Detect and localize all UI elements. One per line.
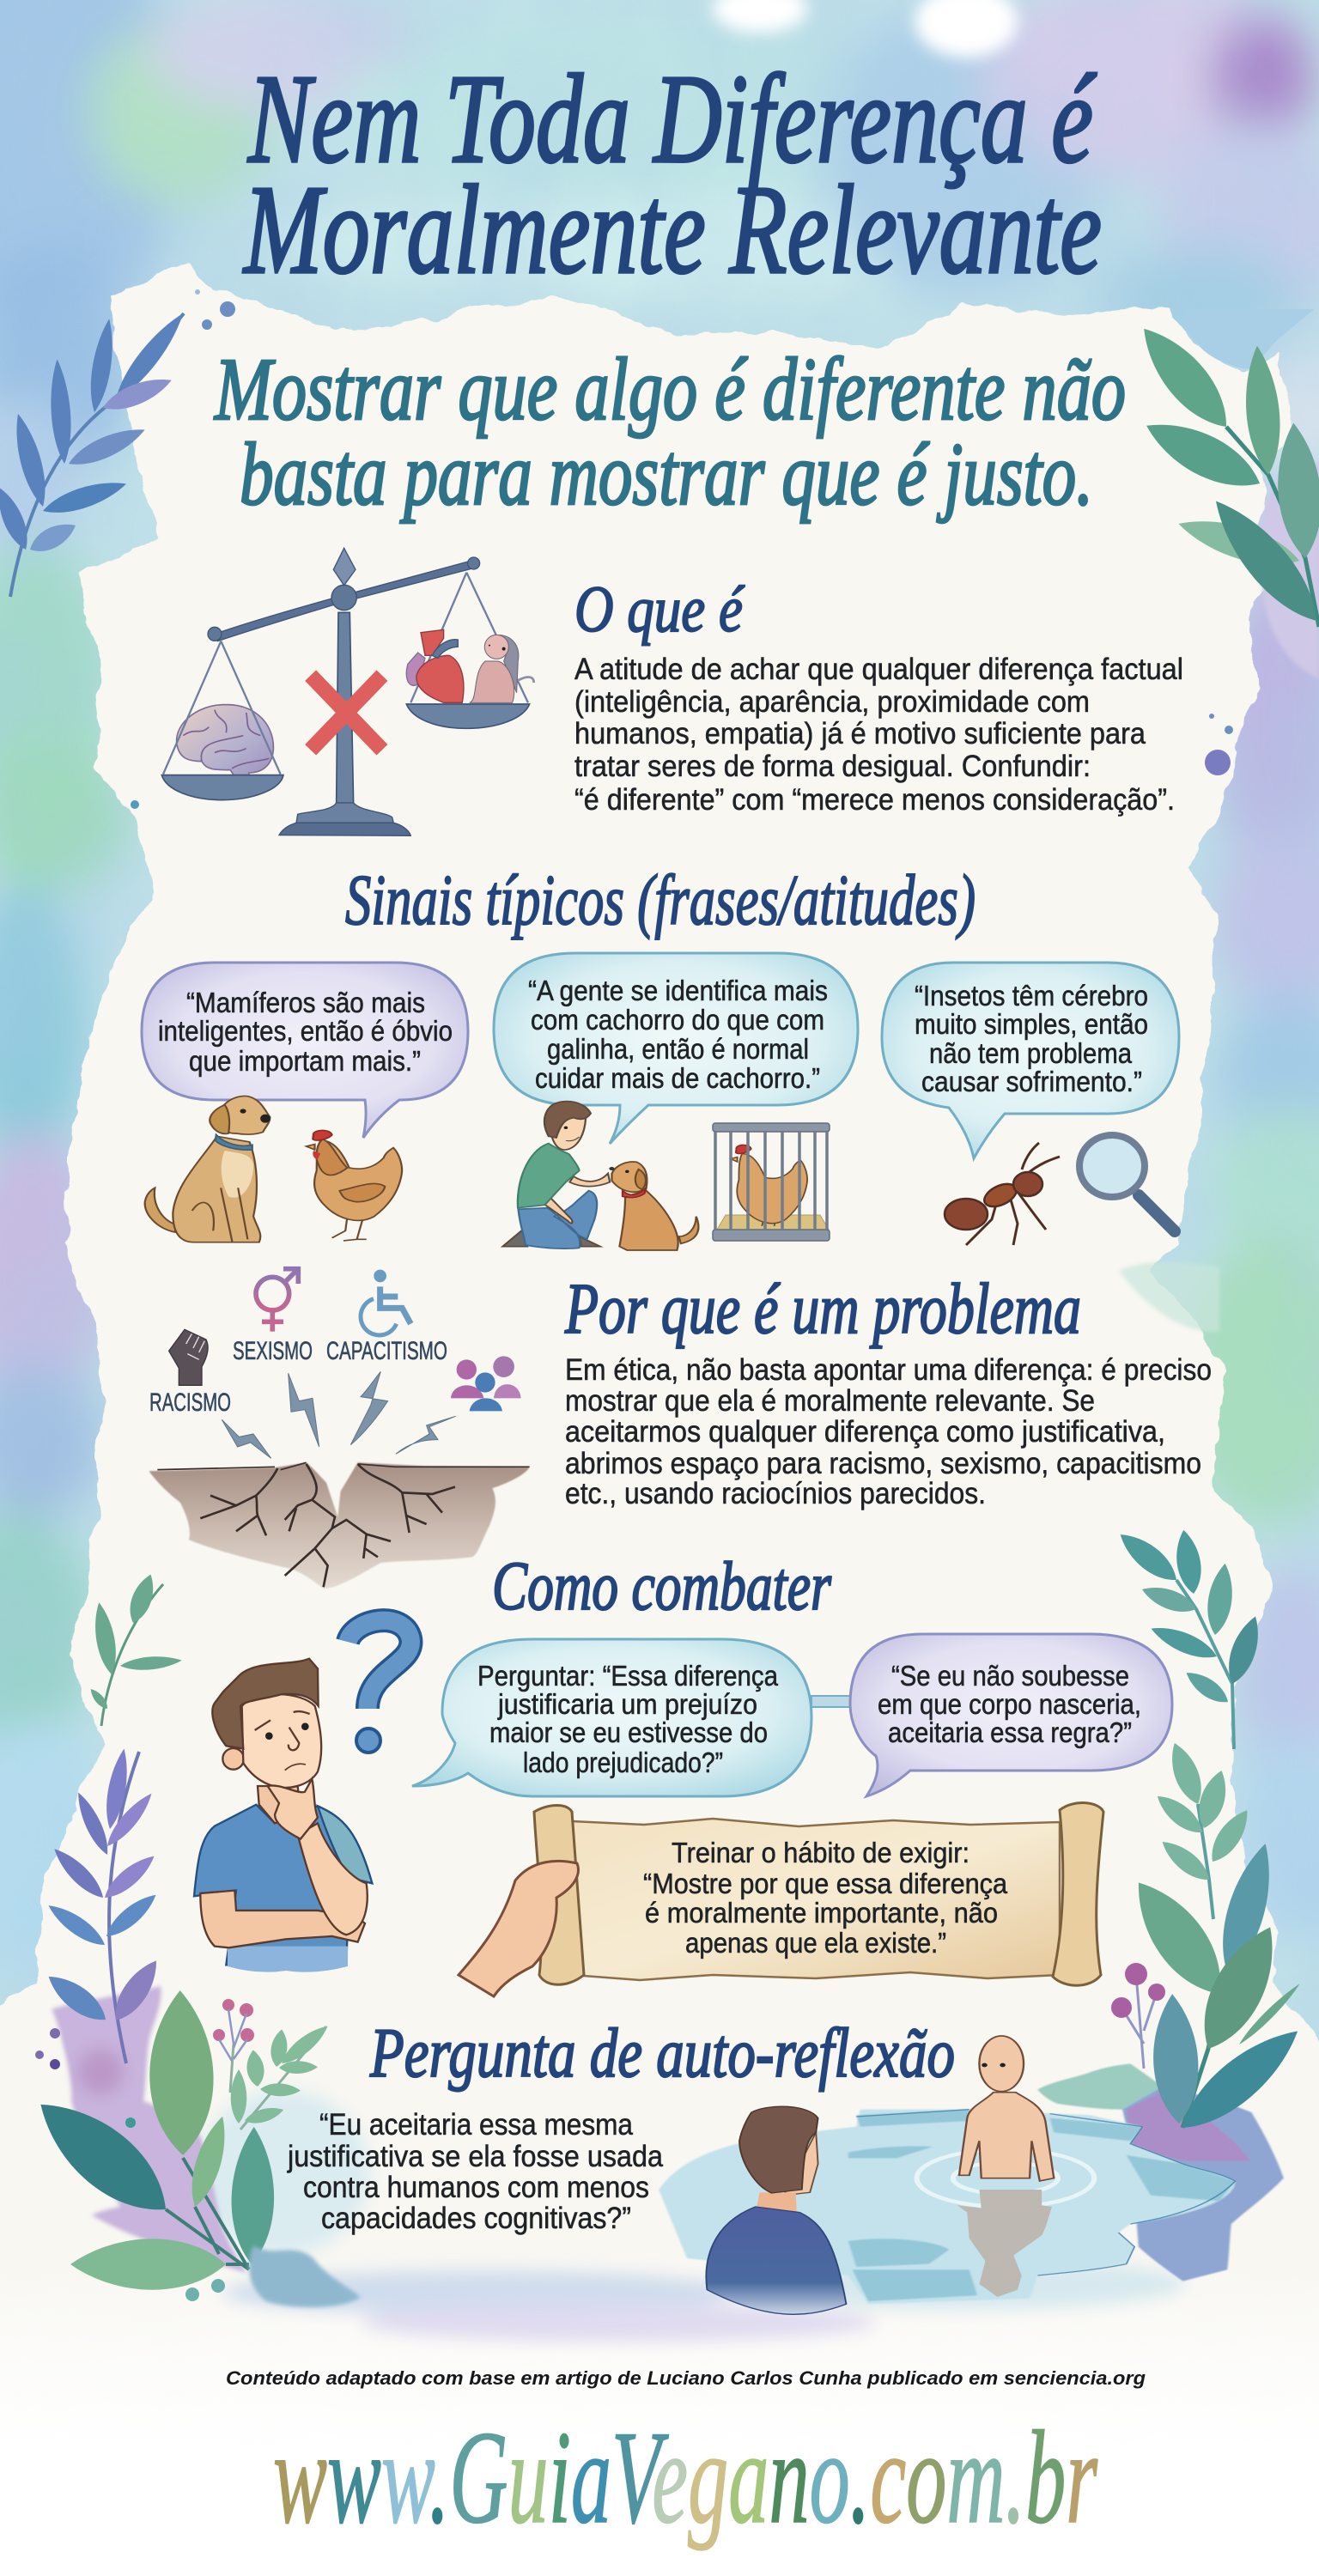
speech bubble 1: que importam mais.” [189, 1045, 421, 1077]
speech bubble purple: “Se eu não soubesse [891, 1660, 1129, 1692]
text block: reflection question: justificativa se ela fosse usada [287, 2140, 663, 2173]
text block: reflection question: contra humanos com menos [303, 2171, 649, 2204]
speech bubble 3: “Insetos têm cérebro [915, 980, 1148, 1012]
icon: question mark [348, 1620, 410, 1753]
heading: pergunta de auto-reflexao: Pergunta de auto-reflexão [369, 2014, 955, 2092]
speech bubble 2: com cachorro do que com [531, 1004, 824, 1036]
speech bubble 2: cuidar mais de cachorro.” [535, 1062, 820, 1094]
man from behind [706, 2106, 846, 2314]
text block: definition: A atitude de achar que qualquer diferença factual [574, 653, 1183, 686]
heading: sinais tipicos: Sinais típicos (frases/atitudes) [345, 860, 976, 940]
scroll with hand: apenas que ela existe.” [685, 1927, 946, 1959]
water [659, 2110, 1236, 2304]
text block: definition: humanos, empatia) já é motivo suficiente para [574, 717, 1146, 750]
illustration: ant [945, 1143, 1060, 1245]
labels: discrimination: RACISMO [149, 1388, 231, 1417]
text block: reflection question: “Eu aceitaria essa mesma [319, 2108, 633, 2142]
speech bubble purple [811, 1634, 1172, 1796]
scroll with hand [459, 1803, 1103, 1996]
speech bubble blue: maior se eu estivesse do [489, 1716, 768, 1748]
caged hen [731, 1145, 807, 1226]
heading: por que e um problema: Por que é um problema [564, 1269, 1081, 1349]
speech bubble purple: em que corpo nasceria, [878, 1688, 1141, 1720]
speech bubble 2: galinha, então é normal [547, 1033, 809, 1065]
labels: discrimination: CAPACITISMO [326, 1337, 447, 1365]
speech bubble 1: “Mamíferos são mais [186, 987, 425, 1018]
illustration: pond with reflection [659, 2036, 1284, 2314]
illustration: sitting dog [145, 1096, 270, 1242]
speech bubble purple: aceitaria essa regra?” [888, 1716, 1132, 1748]
icon: gender symbol [256, 1269, 298, 1332]
plants: bottom right [1111, 1838, 1310, 2143]
paint drops top [131, 289, 1233, 809]
speech bubble 2 [494, 953, 858, 1144]
illustration: man petting dog [502, 1102, 610, 1249]
plants: bottom left [22, 1747, 361, 2307]
icon: balance scale [161, 548, 534, 835]
hand [459, 1861, 578, 1996]
speech bubble 3: não tem problema [929, 1037, 1133, 1069]
speech bubble 1 [142, 963, 468, 1138]
text block: definition [574, 653, 1183, 817]
heading: como combater: Como combater [492, 1549, 832, 1625]
illustration: thinking boy [194, 1659, 372, 1972]
leaf sprigs: middle right [1113, 1526, 1267, 1919]
wash patches: top right [1186, 309, 1319, 678]
logo: website: www.GuiaVegano.com.br [273, 2403, 1097, 2551]
attribution: Conteúdo adaptado com base em artigo de Luciano Carlos Cunha publicado em senciencia.org [226, 2367, 1146, 2389]
brain [177, 705, 273, 784]
text block: why it is a problem: aceitarmos qualquer diferença como justificativa, [565, 1415, 1165, 1449]
illustration: cracked ground [149, 1462, 530, 1589]
icon: fist [169, 1329, 208, 1385]
icon: wheelchair [361, 1270, 410, 1335]
speech bubble blue [412, 1639, 811, 1796]
leaf branch: top right [1128, 316, 1319, 634]
scroll with hand: “Mostre por que essa diferença [643, 1868, 1008, 1899]
purple wash [52, 1986, 246, 2273]
lower watercolor wash [198, 2091, 1185, 2342]
text block: why it is a problem: etc., usando raciocínios parecidos. [565, 1477, 986, 1510]
labels: discrimination: SEXISMO [233, 1337, 313, 1365]
text block: definition: (inteligência, aparência, proximidade com [574, 685, 1090, 719]
text block: why it is a problem: abrimos espaço para racismo, sexismo, capacitismo [565, 1447, 1201, 1480]
red x [311, 676, 382, 750]
illustration: hen [307, 1130, 402, 1241]
speech bubble blue: justificaria um prejuízo [497, 1688, 757, 1720]
small animal [470, 635, 534, 702]
leaf sprig: middle left [88, 1571, 182, 1726]
text block: why it is a problem: Em ética, não basta apontar uma diferença: é preciso [565, 1353, 1212, 1387]
pale teal wash patch [1119, 1262, 1219, 1332]
speech bubble 3: muito simples, então [915, 1008, 1148, 1040]
labels: discrimination [149, 1337, 447, 1417]
illustration: hen in cage [713, 1123, 830, 1241]
reflection [957, 2190, 1052, 2297]
icon: people [451, 1356, 521, 1411]
blue puddle [249, 2245, 361, 2307]
text block: why it is a problem [565, 1353, 1212, 1510]
heart [406, 629, 464, 702]
text block: definition: “é diferente” com “merece menos consideração”. [574, 783, 1175, 817]
speech bubble 3: causar sofrimento.” [921, 1066, 1142, 1097]
scroll with hand: é moralmente importante, não [645, 1897, 998, 1929]
text block: why it is a problem: mostrar que ela é moralmente relevante. Se [565, 1384, 1095, 1418]
text block: reflection question [287, 2108, 663, 2235]
heading: O que é: O que é [574, 574, 745, 646]
speech bubble blue: Perguntar: “Essa diferença [477, 1660, 779, 1692]
icon: lightning bolts [222, 1371, 456, 1458]
speech bubble 2: “A gente se identifica mais [528, 975, 828, 1006]
illustration: small dog [609, 1162, 698, 1250]
text block: definition: tratar seres de forma desigual. Confundir: [574, 750, 1091, 783]
scroll with hand: Treinar o hábito de exigir: [672, 1837, 969, 1868]
speech bubble 3 [882, 963, 1179, 1158]
speech bubble 1: inteligentes, então é óbvio [158, 1015, 453, 1047]
title [243, 49, 1102, 301]
person in water [959, 2036, 1054, 2181]
subtitle [213, 340, 1126, 524]
speech bubble blue: lado prejudicado?” [523, 1747, 723, 1778]
icon: magnifying glass [1079, 1135, 1175, 1231]
text block: reflection question: capacidades cognitivas?” [321, 2202, 631, 2235]
leaf branch: top left [0, 307, 191, 597]
plants behind pond [1037, 2063, 1284, 2281]
